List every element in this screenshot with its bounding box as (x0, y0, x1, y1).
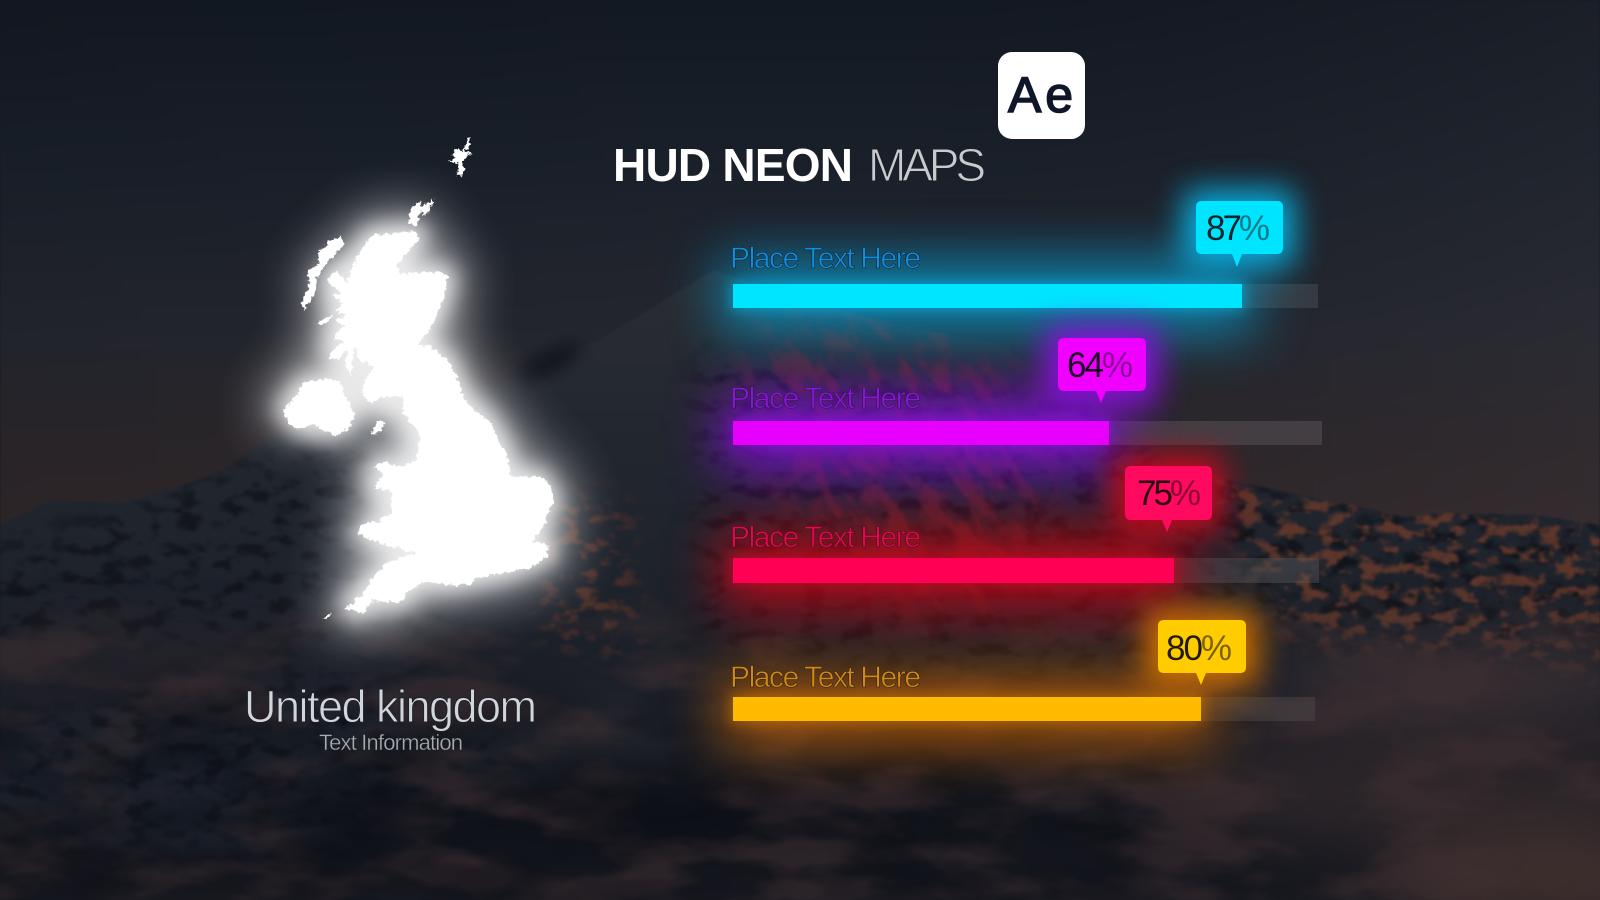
callout (1196, 201, 1283, 267)
country name: United kingdom (244, 681, 537, 732)
map shapes (283, 135, 553, 618)
icon: After Effects badge: Ae (1008, 67, 1073, 123)
bar: 75 percent red (720, 455, 1319, 610)
map caption (244, 681, 537, 755)
label: Place Text Here (730, 661, 921, 694)
map glow (283, 230, 553, 613)
title: MAPS (868, 139, 986, 191)
title (613, 139, 986, 191)
bar: 87 percent cyan (720, 190, 1318, 334)
icon: After Effects badge (998, 52, 1085, 139)
callout: 80% (1166, 629, 1232, 668)
callout (1158, 620, 1246, 685)
callout: 64% (1067, 346, 1133, 385)
map: United Kingdom glowing silhouette (283, 135, 553, 618)
label: Place Text Here (730, 242, 921, 275)
title: HUD NEON (613, 139, 853, 191)
bar: 64 percent magenta (720, 327, 1322, 471)
country sub text: Text Information (319, 730, 463, 755)
bar: 80 percent amber (720, 609, 1315, 748)
callout (1125, 466, 1212, 532)
chart: neon progress bars (720, 190, 1322, 748)
callout: 87% (1206, 209, 1270, 248)
callout: 75% (1137, 474, 1201, 513)
label: Place Text Here (730, 521, 921, 554)
callout (1058, 338, 1146, 403)
label: Place Text Here (730, 382, 921, 415)
